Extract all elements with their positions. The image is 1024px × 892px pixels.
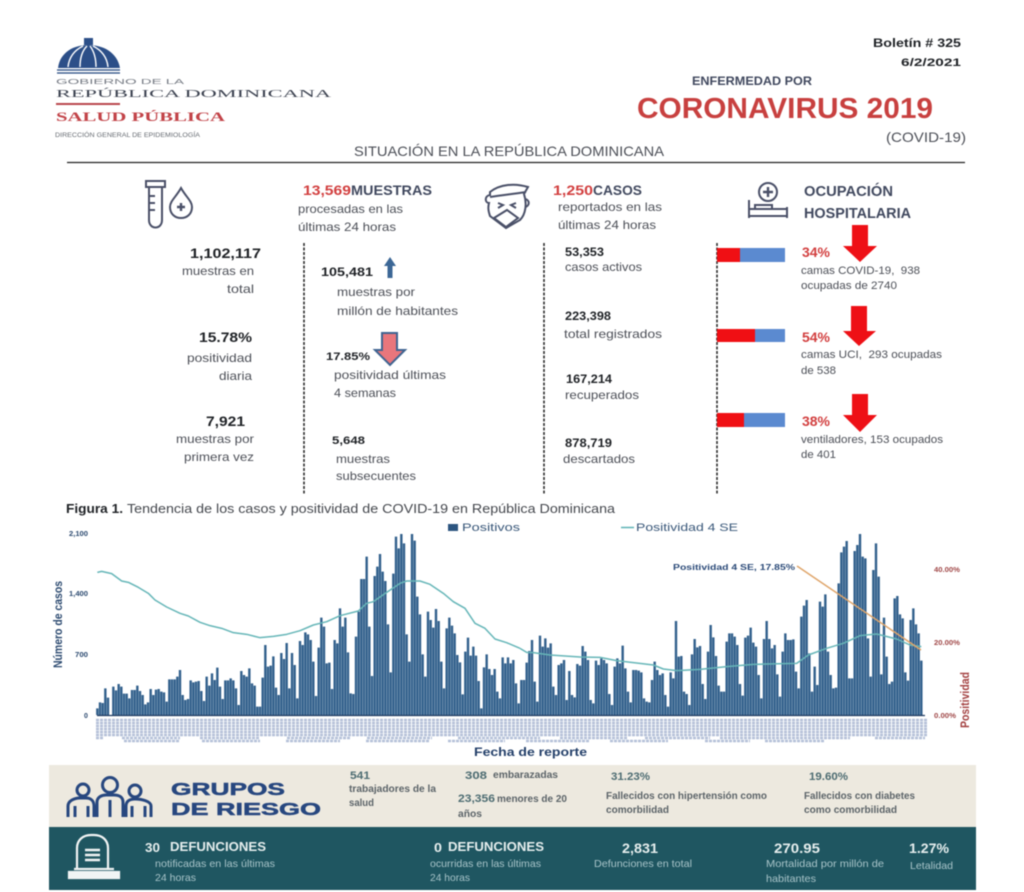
- stat: muestras en total: [182, 245, 261, 296]
- heading: [171, 779, 321, 819]
- stat: primera vez: muestras por: [176, 432, 254, 446]
- stat: positividad diaria: 15.78%: [199, 329, 253, 345]
- stat: subsecuentes: subsecuentes: [336, 469, 416, 483]
- icon: dome: [57, 38, 120, 73]
- icon: tombstone: [69, 835, 119, 878]
- stat: 0 defunciones: DEFUNCIONES: [448, 839, 544, 854]
- stat: descartados: descartados: [563, 452, 635, 466]
- panel: casos: [486, 182, 662, 466]
- stat: menores de 20 años: menores de 20: [497, 794, 567, 805]
- stat: 30 defunciones: DEFUNCIONES: [170, 839, 266, 854]
- item: camas COVID-19: [717, 225, 920, 292]
- item: ventiladores: 38%: [802, 413, 831, 429]
- stat: total registrados: 223,398: [565, 311, 612, 323]
- stat: 0 defunciones: ocurridas en las últimas: [430, 858, 541, 870]
- figure heading: Tendencia de los casos y positividad de COVID-19 en República Dominicana: [127, 501, 616, 516]
- stat: 30 defunciones: 30: [145, 840, 160, 855]
- item: ventiladores: [717, 394, 944, 461]
- right axis: Positividad: [958, 672, 972, 728]
- legend: Positividad 4 SE: [636, 522, 738, 534]
- item: camas COVID-19: camas COVID-19, 938: [801, 265, 920, 277]
- right axis: 0.00%: [934, 713, 957, 720]
- line: positividad 4 SE: [97, 571, 921, 671]
- heading: 13,569 muestras: últimas 24 horas: [298, 220, 396, 234]
- stat: trabajadores de la salud: trabajadores de la: [349, 784, 436, 795]
- stat: total registrados: total registrados: [564, 327, 662, 341]
- legend: Positivos: [462, 522, 521, 534]
- panel: ocupación hospitalaria: [717, 182, 944, 461]
- item: ventiladores: ventiladores, 153 ocupados: [801, 434, 944, 446]
- stat: diabetes: [804, 771, 915, 816]
- stat: descartados: 878,719: [565, 438, 612, 450]
- stat: positividad diaria: [187, 329, 253, 383]
- stat: letalidad: Letalidad: [910, 860, 953, 872]
- x axis title: Fecha de reporte: [474, 745, 587, 759]
- stat: casos activos: [565, 247, 642, 274]
- stat: primera vez: primera vez: [184, 450, 254, 464]
- heading: 13,569 muestras: procesadas en las: [298, 202, 403, 216]
- heading: 13,569 muestras: 13,569: [303, 182, 351, 198]
- left axis: 1,400: [69, 591, 88, 598]
- heading: GRUPOS: [171, 779, 285, 799]
- callout: positividad 17.85%: [673, 563, 921, 650]
- stat: casos activos: 53,353: [565, 247, 604, 259]
- stat: mortalidad: habitantes: [766, 873, 816, 885]
- stat: hipertensión: 31.23%: [611, 771, 650, 783]
- stat: positividad 4 semanas: 4 semanas: [334, 386, 396, 400]
- heading: 13,569 muestras: [298, 182, 432, 234]
- stat: positividad 4 semanas: 17.85%: [326, 351, 370, 363]
- stat: muestras en total: muestras en: [182, 264, 254, 278]
- item: camas UCI: de 538: [801, 365, 836, 377]
- stat: positividad 4 semanas: positividad últimas: [334, 368, 446, 382]
- stat: 30 defunciones: [145, 839, 275, 884]
- stat: letalidad: 1.27%: [909, 840, 950, 856]
- stat: muestras por millón: 105,481: [321, 265, 373, 279]
- icon: people: [68, 778, 151, 817]
- stat: muestras en total: 1,102,117: [190, 245, 261, 261]
- stat: subsecuentes: [332, 435, 416, 483]
- stat: diabetes: Fallecidos con diabetes: [804, 791, 915, 802]
- bars: positivos, second half: [521, 534, 921, 715]
- stat: muestras por millón: muestras por: [337, 285, 415, 299]
- logo: Gobierno de la República Dominicana, Salud Pública: GOBIERNO DE LA: [56, 77, 184, 86]
- legend: [448, 522, 738, 534]
- item: ventiladores: de 401: [801, 449, 836, 461]
- stat: positividad diaria: positividad: [187, 351, 252, 365]
- stat: 30 defunciones: notificadas en las últimas: [155, 858, 275, 870]
- heading: HOSPITALARIA: [804, 206, 912, 222]
- stat: mortalidad: Mortalidad por millón de: [766, 858, 884, 870]
- bulletin number and date: Boletín # 325: [873, 36, 961, 50]
- figure heading: Figura 1.: [66, 501, 123, 516]
- right axis: [934, 567, 972, 728]
- stat: defunciones en total: 2,831: [622, 840, 658, 856]
- title: [637, 74, 966, 145]
- left axis: 0: [84, 713, 88, 720]
- logo: Gobierno de la República Dominicana, Salud Pública: DIRECCIÓN GENERAL DE EPIDEMIOLOGÍA: [55, 130, 201, 139]
- heading: 1,250 casos: 1,250: [553, 182, 593, 198]
- stat: positividad diaria: diaria: [219, 369, 252, 383]
- icon: face with mask: [486, 185, 529, 228]
- stat: diabetes: como comorbilidad: [804, 805, 897, 816]
- stat: defunciones en total: [594, 840, 692, 870]
- stat: recuperados: 167,214: [566, 374, 613, 386]
- item: camas COVID-19: 34%: [802, 244, 831, 260]
- stat: recuperados: recuperados: [565, 388, 639, 402]
- heading: 1,250 casos: CASOS: [593, 182, 642, 198]
- bars: positivos, first half: [97, 534, 519, 715]
- x axis date labels: [96, 720, 927, 741]
- item: camas COVID-19: ocupadas de 2740: [801, 280, 897, 292]
- stat: muestras por millón: [321, 257, 458, 318]
- heading: 1,250 casos: reportados en las: [558, 200, 662, 214]
- stat: hipertensión: Fallecidos con hipertensión como: [606, 791, 767, 802]
- stat: embarazadas: 308: [465, 770, 487, 782]
- stat: mortalidad: 270.95: [774, 840, 820, 856]
- stat: menores de 20 años: 23,356: [458, 793, 495, 805]
- stat: 0 defunciones: [430, 839, 544, 884]
- heading: 1,250 casos: últimas 24 horas: [558, 218, 656, 232]
- stat: hipertensión: [606, 771, 767, 816]
- right axis: 20.00%: [934, 640, 961, 647]
- heading: [804, 182, 912, 222]
- callout: positividad 17.85%: Positividad 4 SE, 17.85%: [673, 563, 795, 572]
- stat: 0 defunciones: 0: [434, 840, 442, 855]
- left axis: 700: [75, 652, 88, 659]
- stat: 30 defunciones: 24 horas: [155, 872, 196, 884]
- stat: hipertensión: comorbilidad: [606, 805, 669, 816]
- logo: Gobierno de la República Dominicana, Salud Pública: SALUD PÚBLICA: [56, 110, 225, 124]
- panel: defunciones: [49, 827, 976, 890]
- left axis: Número de casos: [51, 581, 65, 668]
- stat: trabajadores de la salud: [349, 770, 436, 809]
- item: camas UCI: [717, 306, 943, 377]
- panel: muestras: [146, 181, 458, 483]
- bulletin number and date: 6/2/2021: [901, 57, 961, 69]
- stat: subsecuentes: 5,648: [332, 435, 365, 447]
- title: CORONAVIRUS 2019: [637, 93, 933, 125]
- stat: subsecuentes: muestras: [336, 452, 390, 466]
- stat: letalidad: [909, 840, 953, 872]
- panel: grupos de riesgo: [49, 765, 976, 827]
- stat: menores de 20 años: [458, 793, 567, 820]
- heading: 1,250 casos: [553, 182, 662, 232]
- chart: cases and positivity: [51, 522, 972, 759]
- stat: menores de 20 años: años: [458, 809, 482, 820]
- section heading: SITUACIÓN EN LA REPÚBLICA DOMINICANA: [354, 143, 665, 159]
- stat: mortalidad: [766, 840, 884, 885]
- stat: embarazadas: [465, 770, 558, 782]
- title: ENFERMEDAD POR: [692, 74, 812, 88]
- left axis: [51, 531, 88, 720]
- stat: primera vez: 7,921: [206, 413, 245, 429]
- stat: total registrados: [564, 311, 662, 341]
- stat: descartados: [563, 438, 635, 466]
- icon: hospital bed: [749, 183, 787, 218]
- stat: muestras por millón: millón de habitantes: [337, 304, 458, 318]
- stat: recuperados: [565, 374, 639, 402]
- stat: 0 defunciones: 24 horas: [430, 872, 470, 884]
- icon: test tube and drop: [146, 181, 192, 228]
- stat: diabetes: 19.60%: [809, 771, 848, 783]
- title: (COVID-19): [886, 129, 966, 145]
- left axis: 2,100: [69, 531, 88, 538]
- logo: Gobierno de la República Dominicana, Salud Pública: REPÚBLICA DOMINICANA: [56, 88, 331, 100]
- heading: DE RIESGO: [171, 799, 321, 819]
- stat: embarazadas: embarazadas: [493, 770, 558, 781]
- stat: trabajadores de la salud: salud: [349, 798, 374, 809]
- stat: primera vez: [176, 413, 254, 464]
- stat: casos activos: casos activos: [565, 260, 642, 274]
- item: camas UCI: camas UCI, 293 ocupadas: [801, 349, 943, 361]
- stat: muestras en total: total: [227, 282, 254, 296]
- stat: trabajadores de la salud: 541: [350, 770, 370, 782]
- item: camas UCI: 54%: [802, 329, 831, 345]
- bulletin number and date: [873, 36, 961, 69]
- stat: defunciones en total: Defunciones en total: [594, 858, 692, 870]
- right axis: 40.00%: [934, 567, 961, 574]
- stat: positividad 4 semanas: [326, 333, 446, 400]
- heading: OCUPACIÓN: [804, 182, 893, 200]
- heading: 13,569 muestras: MUESTRAS: [351, 182, 432, 198]
- logo: Gobierno de la República Dominicana, Salud Pública: [55, 38, 331, 139]
